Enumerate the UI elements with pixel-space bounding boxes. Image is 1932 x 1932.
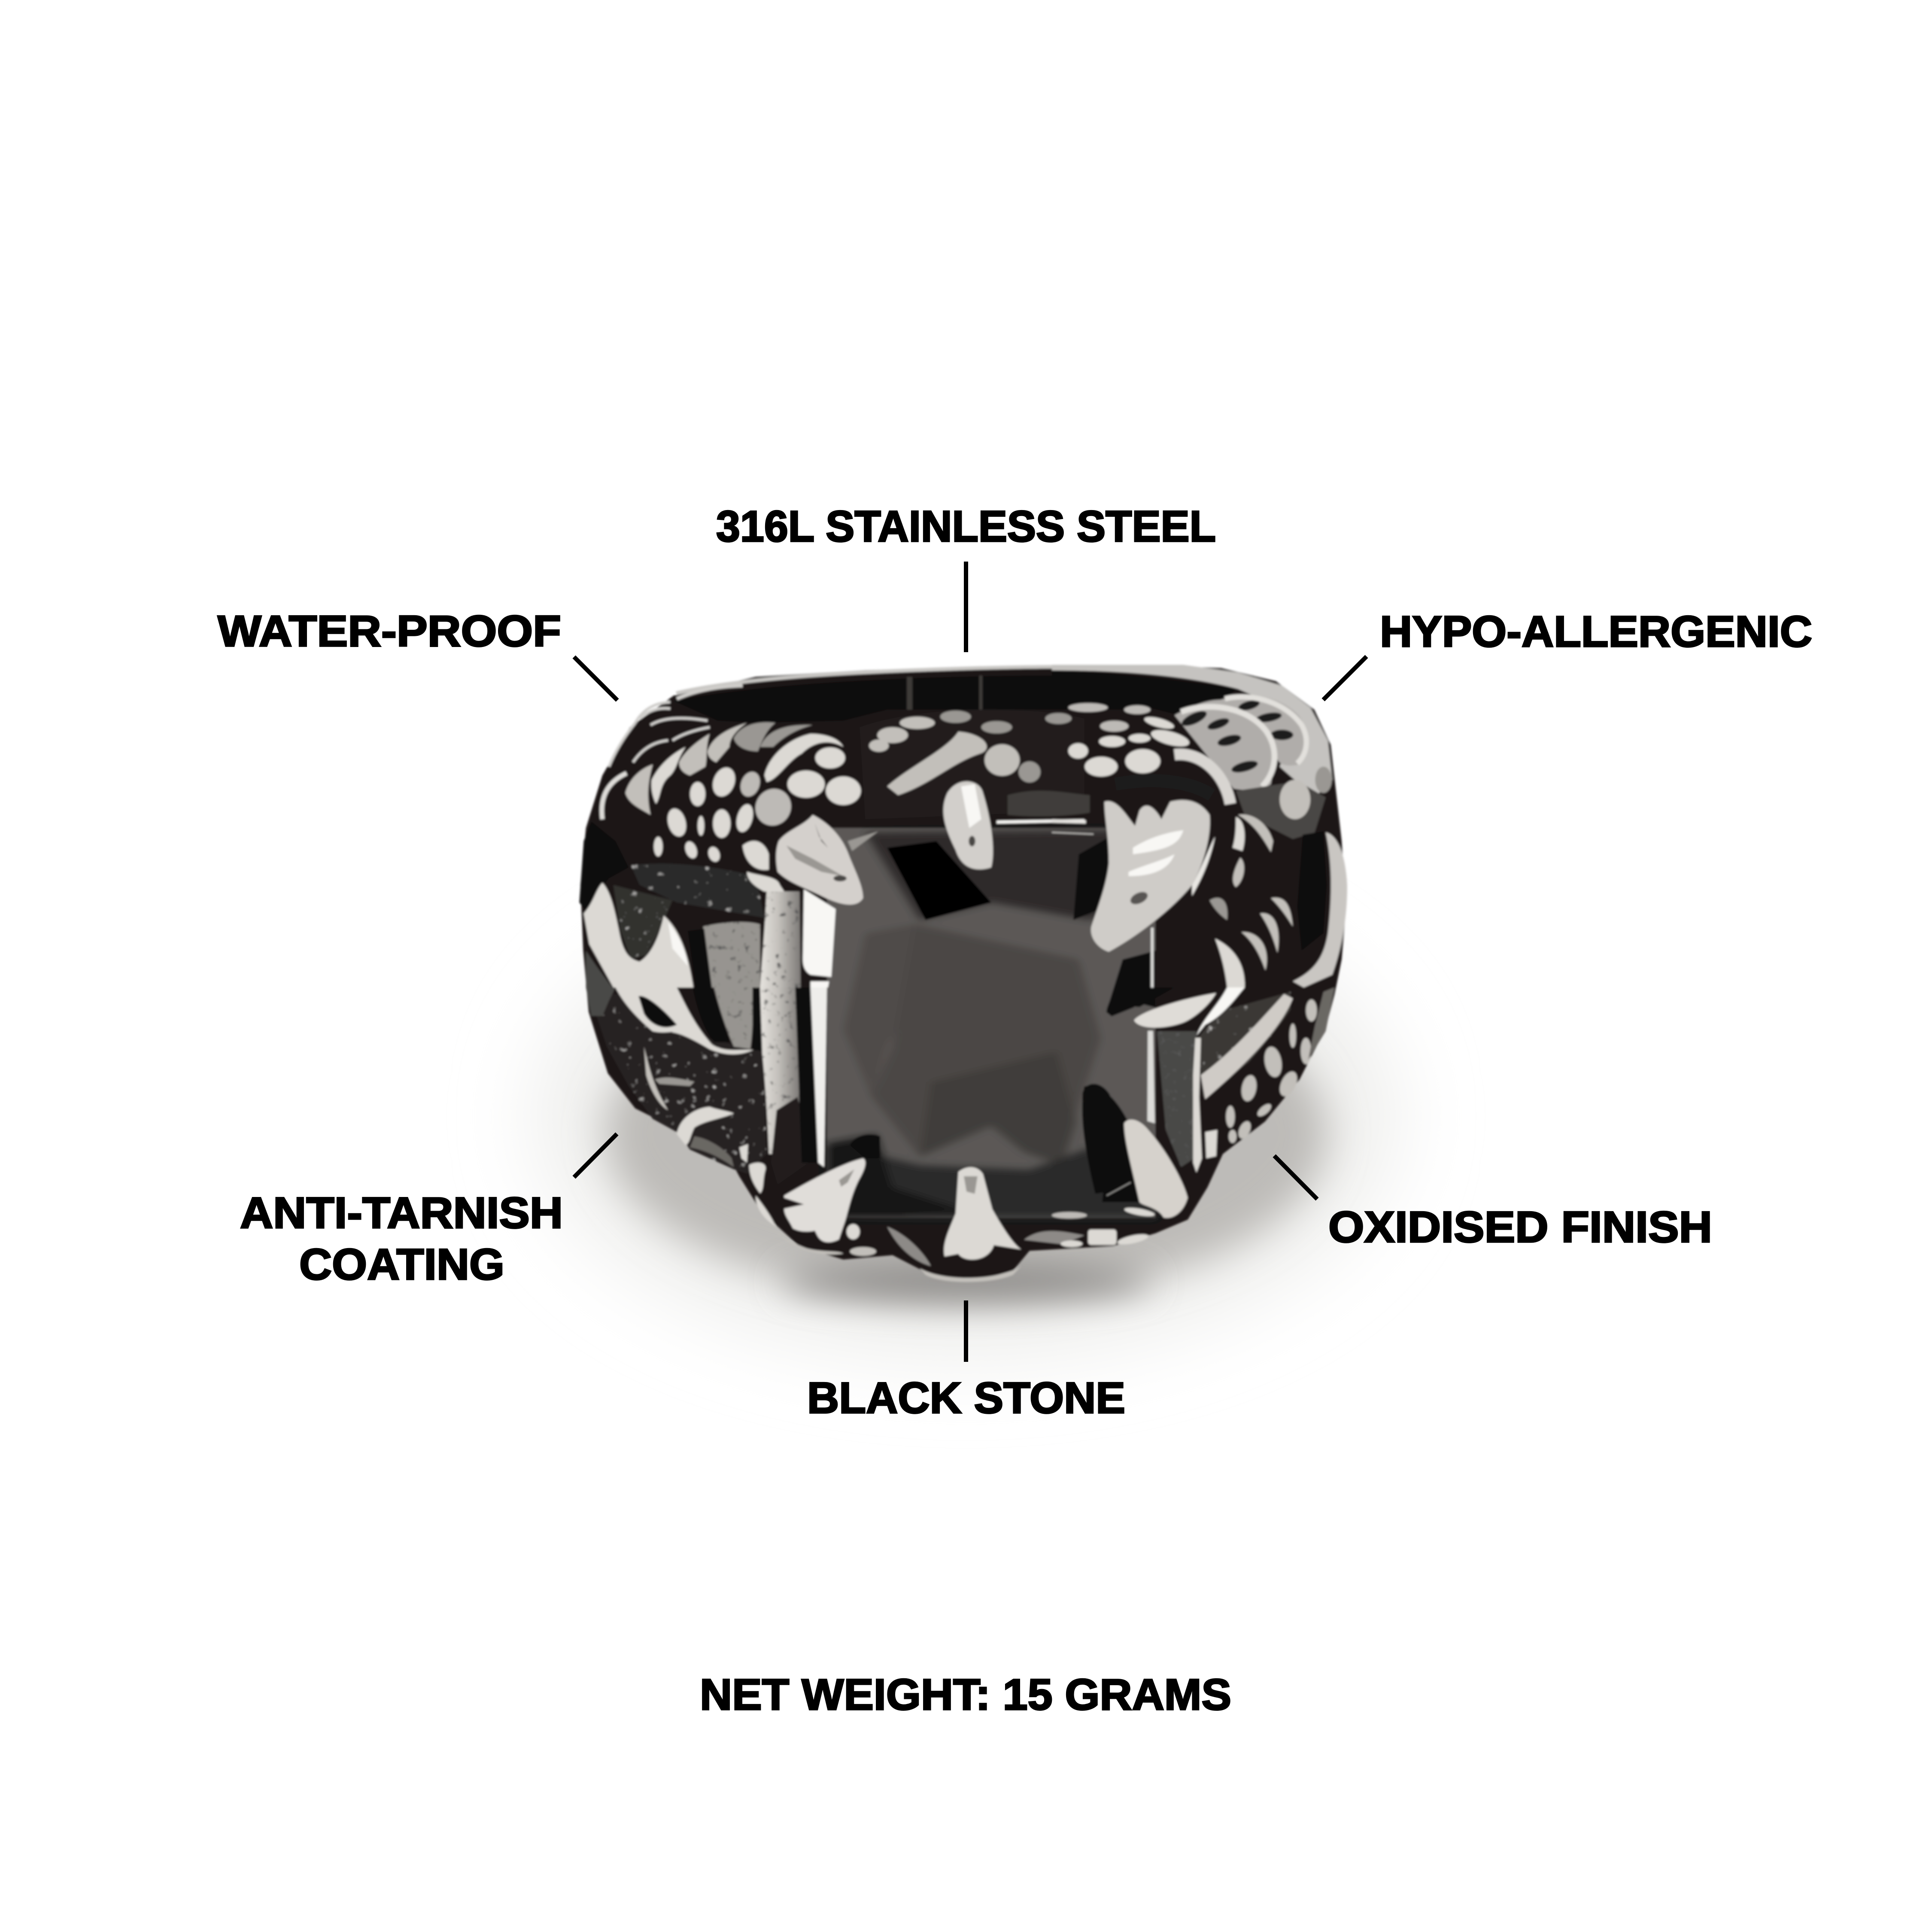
small claws and arc <box>644 1047 668 1110</box>
label: 316L stainless steel: 316L STAINLESS STEEL <box>716 502 1216 551</box>
ring silhouette and stone <box>580 665 1346 1282</box>
black stone reflection <box>1082 1084 1139 1202</box>
beads <box>1045 703 1191 777</box>
lower left claw <box>784 1158 866 1242</box>
stone bulge <box>850 1134 880 1158</box>
upper claw <box>1134 993 1216 1027</box>
vertical claw bar <box>760 892 801 987</box>
label: hypo-allergenic <box>1323 607 1812 700</box>
label: black stone: BLACK STONE <box>807 1373 1125 1422</box>
cross lower arms <box>616 987 694 1033</box>
top-left scales and left fang <box>579 686 878 987</box>
bottom rim beads <box>1052 1206 1155 1247</box>
strip <box>1147 1031 1155 1123</box>
textured patch <box>703 922 760 987</box>
stone bright lines <box>1052 821 1086 822</box>
dark texture <box>589 994 767 1174</box>
top-right scales and large claw <box>1045 665 1347 987</box>
vertical bar <box>760 987 799 1154</box>
white highlight bar <box>803 889 835 977</box>
knuckles and left fang <box>743 841 769 870</box>
label: hypo-allergenic: HYPO-ALLERGENIC <box>1380 607 1812 656</box>
label: anti-tarnish coating: ANTI-TARNISH <box>240 1188 563 1237</box>
centre top claw <box>860 710 1090 869</box>
label: anti-tarnish coating <box>240 1134 617 1289</box>
cross ornament <box>584 883 693 987</box>
dark vein <box>1157 1031 1197 1167</box>
diagonal blade <box>1201 994 1293 1099</box>
right side rib <box>1236 782 1326 839</box>
dark leather-like band <box>631 863 765 918</box>
label: oxidised finish <box>1274 1156 1712 1252</box>
label: oxidised finish: OXIDISED FINISH <box>1328 1203 1712 1252</box>
label: water-proof <box>218 607 617 700</box>
bottom-left ornament and claw <box>586 987 880 1256</box>
bottom-right scales and claw <box>1052 987 1334 1247</box>
ring illustration <box>579 665 1347 1282</box>
beads on right flank <box>1226 999 1317 1143</box>
label: anti-tarnish coating: COATING <box>299 1240 504 1289</box>
fine scale arcs <box>609 686 743 767</box>
large scales <box>626 765 653 815</box>
net weight caption: NET WEIGHT: 15 GRAMS <box>700 1670 1231 1719</box>
lower right claw <box>1124 1120 1188 1218</box>
black stone <box>827 828 1155 1218</box>
rim <box>1052 665 1332 797</box>
ring cast shadow <box>537 876 1395 1357</box>
big claw <box>1115 781 1212 795</box>
small claws <box>1233 817 1245 851</box>
white strip <box>811 987 827 1167</box>
band interior <box>674 675 1224 723</box>
scale arcs <box>1175 696 1309 790</box>
label: water-proof: WATER-PROOF <box>218 607 561 656</box>
beads <box>654 747 861 863</box>
centre bottom claw <box>887 1167 1084 1282</box>
